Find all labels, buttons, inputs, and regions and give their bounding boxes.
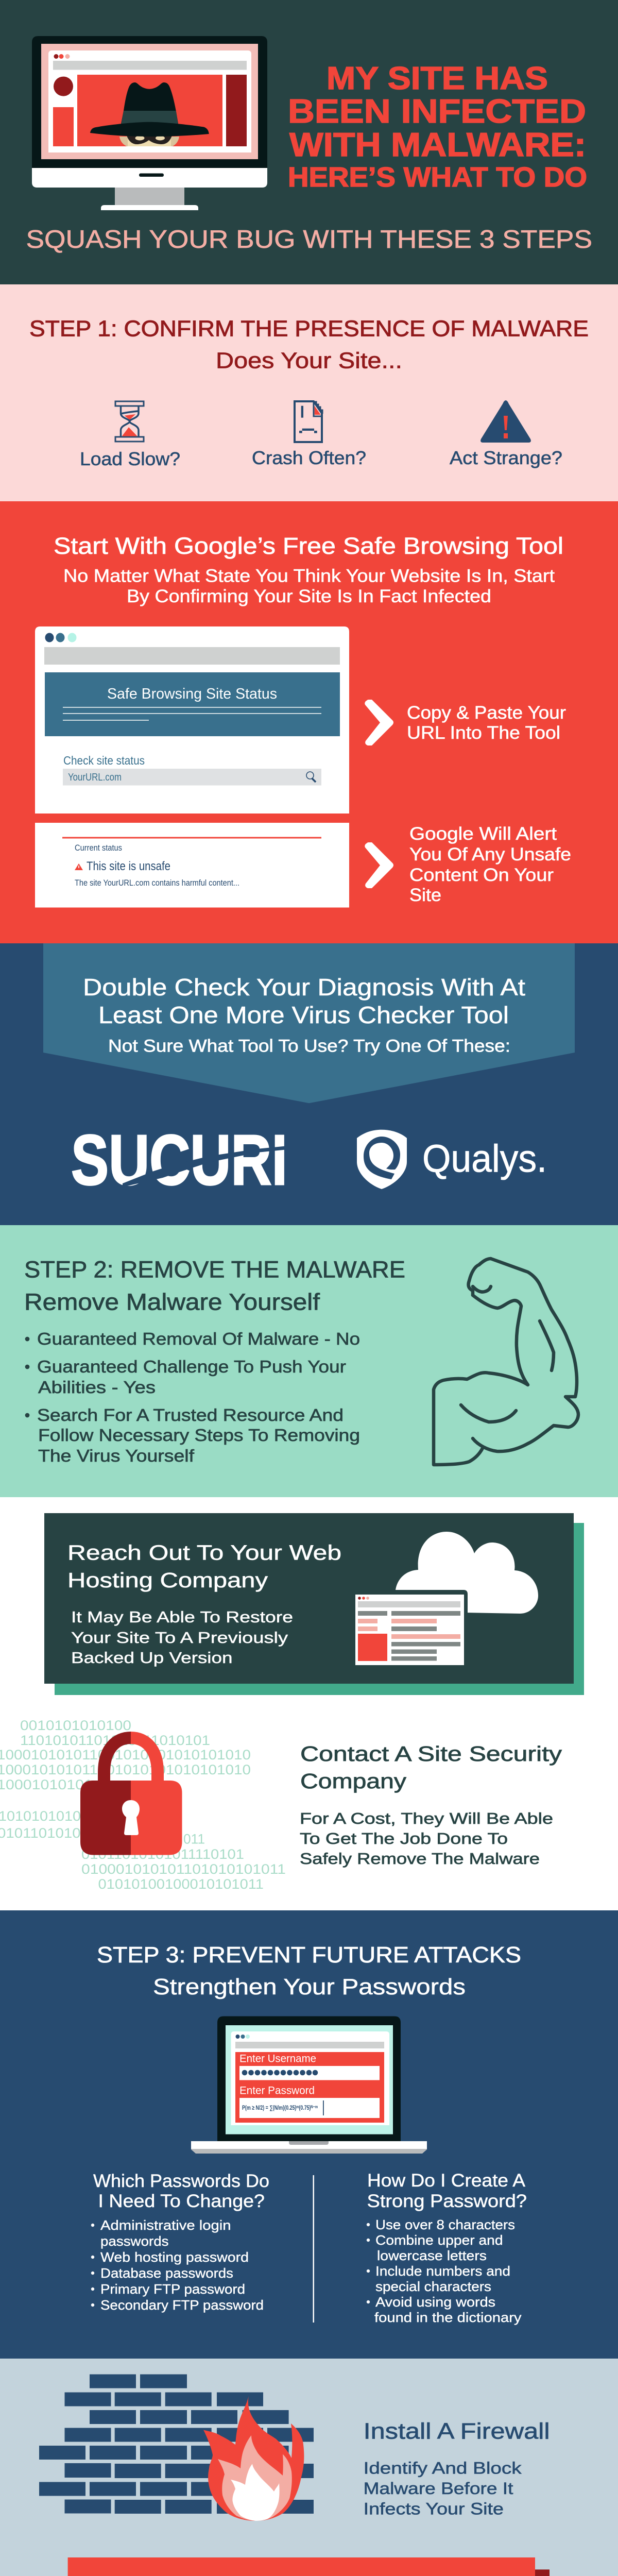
- list: Primary FTP password: [100, 2281, 245, 2297]
- logo: qualys: Qualys.: [422, 1137, 547, 1180]
- heading: firewall: Install A Firewall: [364, 2419, 550, 2444]
- logo: qualys: [357, 1130, 547, 1189]
- list: lowercase letters: [377, 2248, 487, 2263]
- list: [367, 2217, 521, 2325]
- column: which passwords: [91, 2171, 269, 2313]
- list: Secondary FTP password: [100, 2297, 264, 2313]
- subheading: Does Your Site...: [216, 348, 402, 373]
- card: scan your site: [68, 2557, 550, 2576]
- icon: backup page: [353, 1590, 468, 1669]
- panel: prevention tips: [0, 2359, 618, 2576]
- binary digits background: [0, 1718, 286, 1892]
- intro text: By Confirming Your Site Is In Fact Infected: [127, 586, 491, 606]
- arrow: chevron alert step: [365, 842, 393, 888]
- body text: Your Site To A Previously: [71, 1629, 288, 1647]
- list: special characters: [375, 2279, 491, 2294]
- card: web hosting company: [44, 1513, 584, 1695]
- text: firewall body: Identify And Block: [364, 2459, 522, 2477]
- binary digits background: 0010101010100: [20, 1718, 131, 1733]
- text: site security body: [300, 1809, 553, 1868]
- icon: flame: [203, 2396, 304, 2521]
- heading: [67, 1540, 341, 1592]
- heading: step 2: STEP 2: REMOVE THE MALWARE: [24, 1256, 405, 1282]
- icon: laptop login: Enter Password: [239, 2084, 315, 2097]
- icon: padlock: [80, 1738, 182, 1855]
- text: google alert: Content On Your: [409, 865, 554, 885]
- subheading: Strengthen Your Passwords: [153, 1974, 466, 1999]
- browser window: unsafe result: The site YourURL.com contains harmful content...: [75, 878, 239, 888]
- bullet list: Follow Necessary Steps To Removing: [38, 1426, 360, 1445]
- icon: flexed arm: [434, 1259, 578, 1465]
- browser window: site status: [35, 626, 349, 814]
- column heading: Strong Password?: [367, 2191, 527, 2211]
- icon: laptop login: [191, 2016, 427, 2154]
- icon: hourglass: [115, 401, 144, 442]
- heading: site security company: Contact A Site Security: [300, 1742, 562, 1766]
- heading: [83, 974, 525, 1028]
- text: copy and paste: URL Into The Tool: [407, 723, 560, 743]
- list: Administrative login: [100, 2217, 231, 2233]
- binary digits background: 01011010101011110101: [81, 1846, 244, 1862]
- binary digits background: 010001010101101010101011: [81, 1861, 286, 1877]
- intro text: [63, 566, 555, 606]
- intro text: No Matter What State You Think Your Website Is In, Start: [63, 566, 555, 586]
- column heading: I Need To Change?: [98, 2191, 265, 2211]
- title: WITH MALWARE:: [289, 126, 586, 163]
- heading: step 3: STEP 3: PREVENT FUTURE ATTACKS: [97, 1942, 521, 1968]
- title: MY SITE HAS: [327, 61, 548, 96]
- browser window: site status: Check site status: [63, 754, 145, 767]
- heading: Hosting Company: [67, 1568, 268, 1592]
- panel: header: [0, 0, 618, 284]
- bullet list: Guaranteed Removal Of Malware - No: [37, 1329, 360, 1348]
- label: crash often: Crash Often?: [252, 447, 366, 468]
- body text: [71, 1608, 293, 1667]
- list: Combine upper and: [375, 2232, 503, 2248]
- subheading: Not Sure What Tool To Use? Try One Of These:: [108, 1037, 510, 1056]
- panel: white help section: [0, 1513, 584, 1889]
- title: BEEN INFECTED: [288, 92, 586, 130]
- heading: step 1: STEP 1: CONFIRM THE PRESENCE OF MALWARE: [29, 316, 589, 342]
- icon: laptop login: P(m ≥ N/2) = ∑(N/m)(0.25)ᵐ(0.75)ᴺ⁻ᵐ: [242, 2104, 318, 2111]
- icon: cloud: [396, 1532, 538, 1614]
- binary digits background: 11010101101010111010101: [20, 1733, 210, 1748]
- text: copy and paste: Copy & Paste Your: [407, 703, 566, 723]
- browser window: unsafe result: Current status: [75, 843, 122, 853]
- text: site security body: Safely Remove The Malware: [300, 1850, 540, 1868]
- text: copy and paste: [407, 703, 566, 743]
- body text: It May Be Able To Restore: [71, 1608, 293, 1626]
- arrow: chevron copy step: [365, 700, 393, 745]
- column heading: [93, 2171, 269, 2211]
- label: act strange: Act Strange?: [450, 447, 562, 468]
- panel: step 2: [0, 1225, 618, 1497]
- icon: crashed page: [295, 401, 322, 442]
- list: Use over 8 characters: [375, 2217, 515, 2232]
- banner: [43, 943, 575, 1103]
- list: Database passwords: [100, 2265, 233, 2281]
- heading: site security company: [300, 1742, 562, 1793]
- bullet list: Search For A Trusted Resource And: [37, 1405, 344, 1425]
- text: firewall body: Malware Before It: [364, 2479, 513, 2498]
- list: Include numbers and: [375, 2263, 510, 2279]
- bullet list: The Virus Yourself: [38, 1446, 195, 1465]
- text: google alert: Google Will Alert: [409, 824, 557, 844]
- subheading: Remove Malware Yourself: [24, 1289, 320, 1315]
- list: passwords: [100, 2233, 169, 2249]
- browser window: site status: Safe Browsing Site Status: [107, 686, 277, 702]
- binary digits background: 011: [183, 1832, 205, 1847]
- column heading: [367, 2171, 527, 2211]
- label: load slow: Load Slow?: [80, 448, 180, 469]
- binary digits background: 100010101011001010101010101010: [0, 1747, 251, 1762]
- subtitle: SQUASH YOUR BUG WITH THESE 3 STEPS: [26, 226, 592, 253]
- body text: Backed Up Version: [71, 1649, 233, 1667]
- text: firewall body: [364, 2459, 522, 2518]
- panel: step 3: [0, 1910, 618, 2359]
- bullet list: [25, 1329, 360, 1465]
- bullet list: Guaranteed Challenge To Push Your: [37, 1357, 346, 1376]
- text: google alert: You Of Any Unsafe: [409, 844, 571, 865]
- panel: safe browsing tool: [0, 501, 618, 943]
- bullet list: Abilities - Yes: [38, 1378, 156, 1397]
- icon: monitor with hacker: [32, 36, 267, 210]
- title: [288, 61, 587, 193]
- heading: Reach Out To Your Web: [67, 1540, 341, 1564]
- text: site security body: For A Cost, They Will Be Able: [300, 1809, 553, 1827]
- browser window: site status: YourURL.com: [68, 772, 122, 783]
- panel: step 1: [0, 284, 618, 501]
- text: google alert: Site: [409, 885, 441, 905]
- list: Avoid using words: [375, 2294, 495, 2310]
- icon: warning triangle: [480, 400, 531, 443]
- browser window: unsafe result: This site is unsafe: [87, 859, 170, 873]
- list: Web hosting password: [100, 2249, 249, 2265]
- text: google alert: [409, 824, 571, 905]
- column heading: Which Passwords Do: [93, 2171, 269, 2191]
- heading: Start With Google’s Free Safe Browsing Tool: [54, 533, 563, 559]
- binary digits background: 100010101011001010101010101010: [0, 1762, 251, 1777]
- heading: site security company: Company: [300, 1769, 407, 1793]
- icon: brick wall: [39, 2374, 314, 2514]
- binary digits background: 10101010101: [0, 1808, 89, 1824]
- panel: virus checker tools: [0, 943, 618, 1225]
- list: found in the dictionary: [374, 2310, 521, 2325]
- browser window: unsafe result: [35, 823, 349, 908]
- binary digits background: 01010100100010101011: [98, 1876, 264, 1892]
- text: site security body: To Get The Job Done To: [300, 1829, 508, 1848]
- list: [91, 2217, 264, 2313]
- heading: Least One More Virus Checker Tool: [98, 1002, 509, 1028]
- icon: laptop login: Enter Username: [239, 2053, 316, 2065]
- logo: sucuri: SUCURI: [71, 1121, 287, 1200]
- heading: Double Check Your Diagnosis With At: [83, 974, 525, 1001]
- text: firewall body: Infects Your Site: [364, 2500, 504, 2518]
- column: strong password: [367, 2171, 527, 2325]
- column heading: How Do I Create A: [367, 2171, 526, 2191]
- title: HERE’S WHAT TO DO: [288, 162, 587, 193]
